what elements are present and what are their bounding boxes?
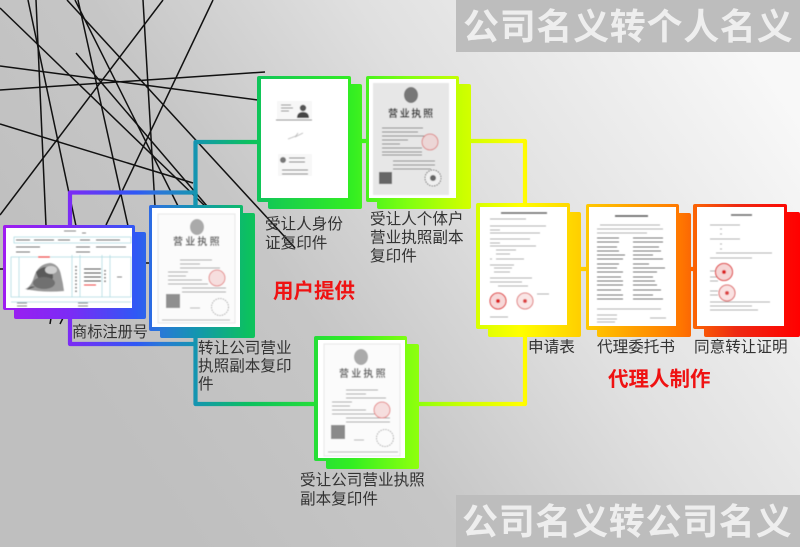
label: transferee sole-trader licence copy: 复印件	[370, 247, 417, 265]
document: ID card copies	[276, 101, 312, 176]
document: business licence: 营业执照	[388, 107, 435, 120]
document: application form	[490, 213, 549, 317]
document: authorisation letter	[597, 216, 666, 322]
card: transferee sole-trader licence	[366, 76, 471, 209]
connector lines	[70, 141, 800, 404]
card: agent authorisation letter	[586, 204, 691, 337]
label: application form: 申请表	[528, 338, 575, 356]
card: transfer consent certificate	[693, 204, 800, 337]
label: transferor licence copy: 件	[198, 375, 214, 393]
label: transferee sole-trader licence copy: 营业执照副本	[370, 228, 464, 246]
card: transferee ID copy	[257, 76, 362, 209]
banner: company to company: 公司名义转公司名义	[462, 501, 792, 542]
heading: made by agent: 代理人制作	[608, 368, 710, 391]
label: transferee ID copy: 受让人身份	[265, 216, 343, 233]
black crossing lines	[0, 0, 295, 324]
label: consent certificate: 同意转让证明	[694, 337, 788, 356]
document: business licence: 营业执照	[339, 367, 388, 380]
card: transferee company licence	[314, 336, 419, 469]
label: transferee company licence copy: 副本复印件	[300, 490, 378, 508]
label: transferor licence copy: 执照副本复印	[198, 357, 292, 375]
card: application form	[476, 203, 581, 337]
heading: provided by user: 用户提供	[273, 279, 355, 303]
label: transferee sole-trader licence copy: 受让人个体户	[370, 211, 464, 228]
label: authorisation letter: 代理委托书	[597, 338, 675, 356]
banner: company to individual: 公司名义转个人名义	[463, 6, 793, 47]
label: transferee company licence copy: 受让公司营业执照	[300, 472, 425, 489]
label: transferee ID copy: 证复印件	[265, 234, 327, 252]
document: business licence: 营业执照	[173, 235, 222, 248]
card: trademark registration	[3, 225, 146, 319]
card: transferor company licence	[149, 205, 255, 338]
document: consent certificate	[710, 215, 772, 310]
document: trademark table	[11, 231, 131, 306]
label: trademark number: 商标注册号	[72, 324, 148, 341]
label: transferor licence copy: 转让公司营业	[198, 340, 292, 357]
